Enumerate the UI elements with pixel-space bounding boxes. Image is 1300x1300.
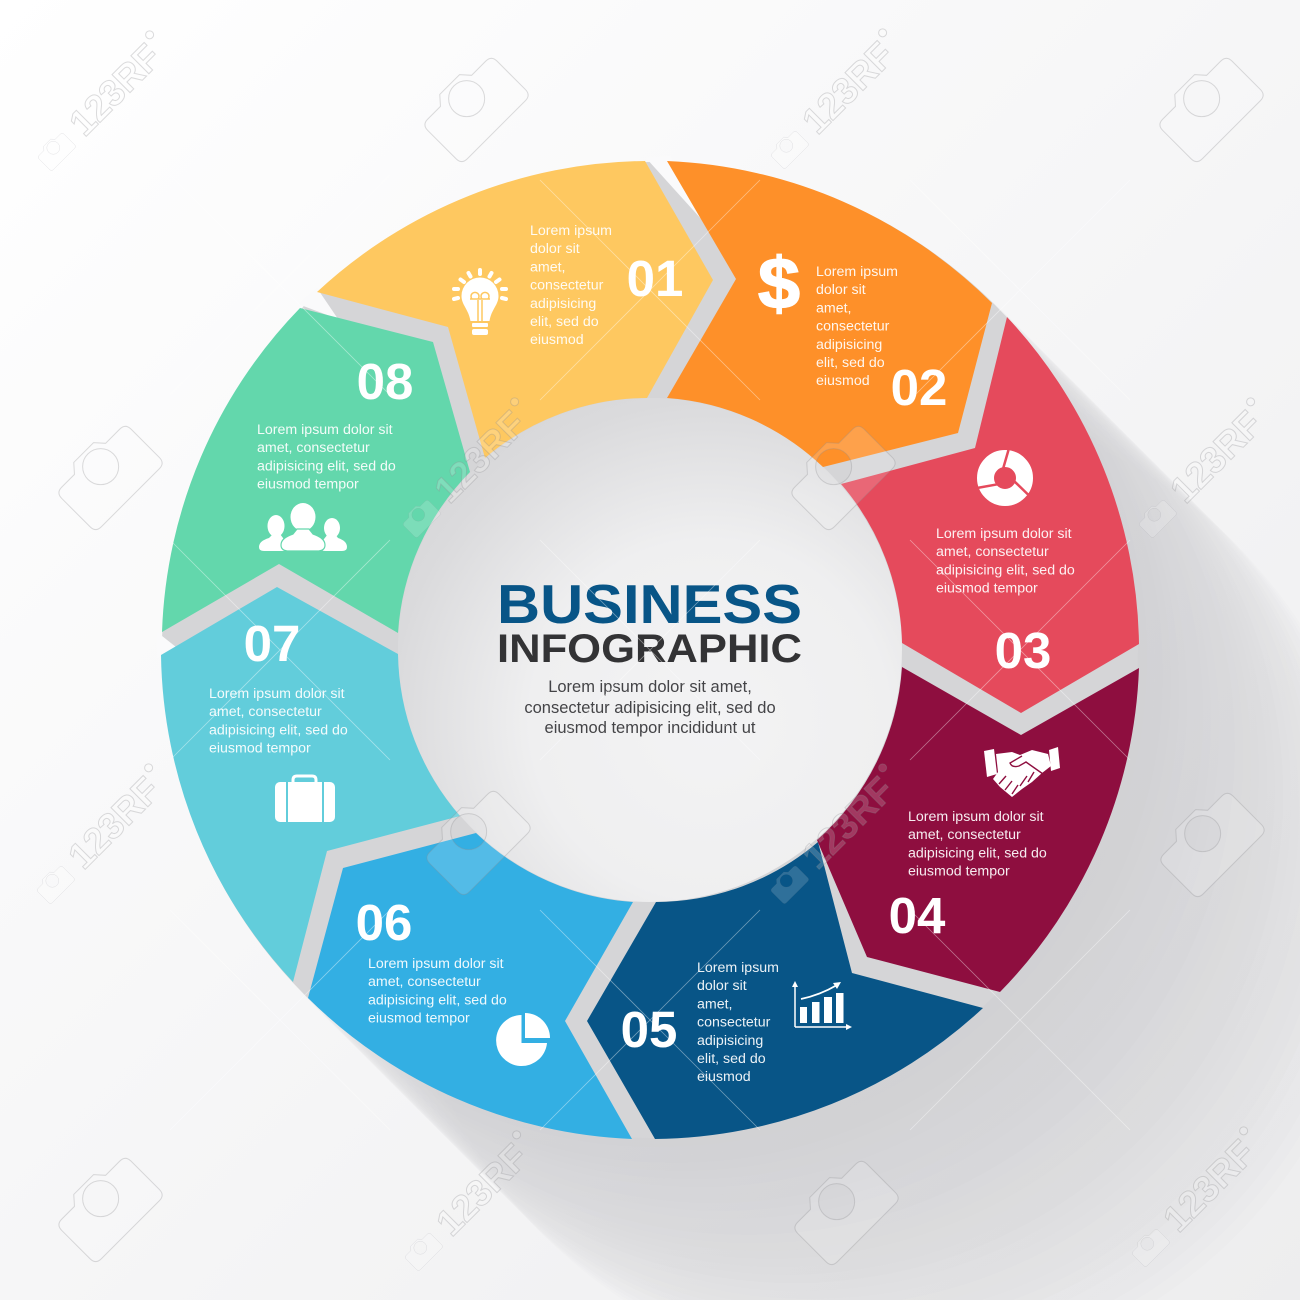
text block 05: eiusmod bbox=[697, 1069, 751, 1085]
text block 08: Lorem ipsum dolor sit bbox=[257, 422, 393, 438]
text block 06: eiusmod tempor bbox=[368, 1011, 470, 1027]
panel: segment 08 bbox=[162, 308, 470, 633]
text block 01: elit, sed do bbox=[530, 314, 599, 330]
text block 08: adipisicing elit, sed do bbox=[257, 458, 396, 474]
text block 02: adipisicing bbox=[816, 337, 882, 353]
text block 07: amet, consectetur bbox=[209, 704, 322, 720]
text block 03: amet, consectetur bbox=[936, 544, 1049, 560]
panel: segment 06 bbox=[308, 833, 633, 1139]
title bbox=[497, 573, 802, 737]
icon: cycle arrows bbox=[977, 450, 1028, 498]
heading: business: BUSINESS bbox=[497, 573, 802, 635]
text block 02: amet, bbox=[816, 300, 851, 316]
number 02: 02 bbox=[891, 359, 947, 416]
center text block: Lorem ipsum dolor sit amet, bbox=[548, 678, 752, 696]
text block 01: consectetur bbox=[530, 278, 604, 294]
text block 02: eiusmod bbox=[816, 373, 870, 389]
center text block: eiusmod tempor incididunt ut bbox=[545, 719, 756, 737]
icon: dollar: $ bbox=[758, 244, 800, 324]
shadow band in gaps between segments bbox=[162, 162, 1138, 1138]
text block 05: Lorem ipsum bbox=[697, 960, 779, 976]
number 01: 01 bbox=[627, 250, 683, 307]
watermarks: 123RF bbox=[1155, 1132, 1263, 1240]
text block 01: amet, bbox=[530, 259, 565, 275]
text block 04: eiusmod tempor bbox=[908, 864, 1010, 880]
center circle bbox=[398, 398, 902, 902]
icon: bar chart bbox=[792, 981, 852, 1030]
watermarks: 123RF bbox=[60, 769, 168, 877]
text block 04: adipisicing elit, sed do bbox=[908, 845, 1047, 861]
text block 01: adipisicing bbox=[530, 296, 596, 312]
number 05: 05 bbox=[621, 1001, 677, 1058]
long drop shadow of ring bbox=[322, 322, 1300, 1300]
icon: light bulb bbox=[454, 270, 506, 335]
number 04: 04 bbox=[889, 887, 946, 944]
text block 03: Lorem ipsum dolor sit bbox=[936, 526, 1072, 542]
panel: segment 05 bbox=[587, 842, 983, 1139]
number 08: 08 bbox=[357, 353, 413, 410]
text block 04: Lorem ipsum dolor sit bbox=[908, 809, 1044, 825]
center text block: consectetur adipisicing elit, sed do bbox=[524, 699, 776, 717]
text block 08: eiusmod tempor bbox=[257, 477, 359, 493]
text block 04: amet, consectetur bbox=[908, 827, 1021, 843]
text block 02: Lorem ipsum bbox=[816, 264, 898, 280]
text block 03: eiusmod tempor bbox=[936, 581, 1038, 597]
text block 05: amet, bbox=[697, 996, 732, 1012]
watermarks: 123RF bbox=[426, 403, 534, 511]
text block 03: adipisicing elit, sed do bbox=[936, 562, 1075, 578]
watermarks: 123RF bbox=[794, 769, 902, 877]
watermarks: 123RF bbox=[1162, 403, 1270, 511]
heading: infographic: INFOGRAPHIC bbox=[497, 627, 802, 671]
text block 07: eiusmod tempor bbox=[209, 741, 311, 757]
text block 01: Lorem ipsum bbox=[530, 223, 612, 239]
icon: suitcase bbox=[275, 776, 335, 822]
text block 01: dolor sit bbox=[530, 241, 580, 257]
icon: people bbox=[259, 503, 347, 551]
watermark hairlines bbox=[170, 175, 1130, 1130]
icon: pie chart bbox=[496, 1013, 550, 1066]
icon: handshake bbox=[984, 747, 1060, 797]
watermarks: 123RF bbox=[61, 36, 169, 144]
text block 07: Lorem ipsum dolor sit bbox=[209, 686, 345, 702]
number 07: 07 bbox=[244, 615, 300, 672]
text block 05: elit, sed do bbox=[697, 1051, 766, 1067]
text block 06: adipisicing elit, sed do bbox=[368, 992, 507, 1008]
panel: segment 03 bbox=[841, 317, 1139, 713]
text block 05: consectetur bbox=[697, 1015, 771, 1031]
watermarks: 123RF bbox=[794, 34, 902, 142]
text block 06: amet, consectetur bbox=[368, 974, 481, 990]
text block 05: dolor sit bbox=[697, 978, 747, 994]
text block 06: Lorem ipsum dolor sit bbox=[368, 956, 504, 972]
panel: segment 02 bbox=[667, 161, 992, 467]
watermarks: 123RF bbox=[428, 1136, 536, 1244]
text block 02: dolor sit bbox=[816, 282, 866, 298]
number 03: 03 bbox=[995, 622, 1051, 679]
panel: segment 01 bbox=[317, 161, 713, 458]
text block 01: eiusmod bbox=[530, 332, 584, 348]
text block 08: amet, consectetur bbox=[257, 440, 370, 456]
number 06: 06 bbox=[356, 894, 412, 951]
text block 05: adipisicing bbox=[697, 1033, 763, 1049]
panel: segment 04 bbox=[817, 667, 1139, 992]
text block 07: adipisicing elit, sed do bbox=[209, 722, 348, 738]
text block 02: consectetur bbox=[816, 319, 890, 335]
panel: segment 07 bbox=[161, 587, 460, 982]
text block 02: elit, sed do bbox=[816, 355, 885, 371]
gap highlights at upper left bbox=[157, 156, 712, 658]
